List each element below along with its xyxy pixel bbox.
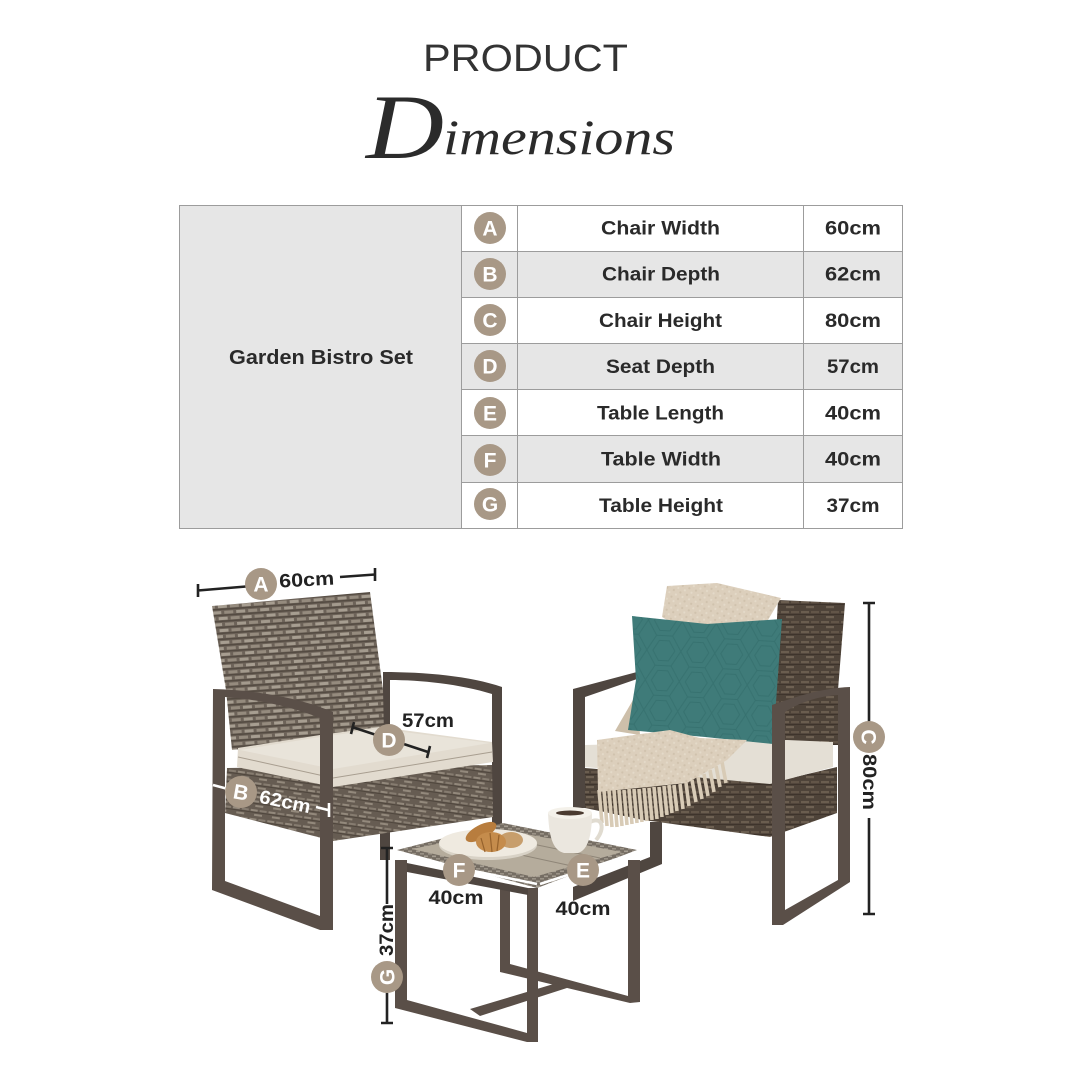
callout B: chair depth: 62cm bbox=[257, 787, 313, 818]
callout G: table height bbox=[371, 848, 403, 1023]
table top bbox=[397, 823, 637, 888]
row A: chair width: Chair Width bbox=[601, 218, 720, 240]
row C: chair height: 80cm bbox=[825, 311, 881, 332]
row G: table height: G bbox=[482, 494, 498, 516]
wicker seat base bbox=[225, 765, 493, 841]
product name cell bbox=[180, 205, 461, 528]
row G: table height: Table Height bbox=[599, 496, 724, 517]
teal pillow bbox=[628, 616, 782, 744]
row F: table width bbox=[474, 444, 881, 476]
heading: script Dimensions: imensions bbox=[443, 109, 675, 165]
chair back frame bbox=[383, 672, 502, 830]
row D: seat depth bbox=[474, 350, 879, 382]
callout D: seat depth bbox=[351, 711, 454, 758]
callout A: chair width bbox=[198, 568, 375, 600]
row C: chair height: C bbox=[482, 310, 498, 332]
heading: PRODUCT: PRODUCT bbox=[423, 38, 628, 80]
row F: table width: F bbox=[484, 450, 497, 472]
plate with croissants bbox=[439, 818, 537, 860]
callout A: chair width: 60cm bbox=[279, 569, 335, 592]
callout G: table height: G bbox=[376, 969, 400, 985]
knitted throw with fringe bbox=[597, 730, 747, 827]
callout C: chair height: 80cm bbox=[858, 754, 879, 810]
row B: chair depth: B bbox=[482, 264, 498, 286]
row B: chair depth: 62cm bbox=[825, 264, 881, 286]
callout E: table length: E bbox=[576, 860, 590, 882]
seat cushion bbox=[237, 727, 493, 787]
row D: seat depth: 57cm bbox=[827, 357, 879, 378]
row D: seat depth: Seat Depth bbox=[606, 357, 715, 378]
callout F: table width bbox=[396, 854, 537, 909]
row E: table length bbox=[474, 397, 881, 429]
row F: table width: Table Width bbox=[601, 450, 721, 470]
heading: script Dimensions: D bbox=[364, 76, 444, 178]
product name cell: Garden Bistro Set bbox=[229, 347, 413, 369]
row E: table length: 40cm bbox=[825, 404, 881, 424]
row A: chair width: A bbox=[482, 218, 498, 240]
row A: chair width bbox=[474, 212, 881, 244]
wicker seat base bbox=[585, 767, 837, 837]
rear leg frame bbox=[573, 822, 662, 901]
row E: table length: E bbox=[483, 402, 497, 426]
left arm frame bbox=[573, 672, 637, 808]
coffee cup bbox=[548, 807, 602, 853]
side table bbox=[395, 807, 640, 1042]
callout G: table height: 37cm bbox=[377, 904, 398, 956]
row G: table height bbox=[474, 488, 880, 520]
row C: chair height bbox=[474, 304, 881, 336]
callout F: table width: 40cm bbox=[428, 888, 484, 909]
callout E: table length bbox=[540, 853, 636, 920]
table legs and rails bbox=[395, 860, 640, 1042]
right wicker chair bbox=[573, 583, 850, 925]
dimensions table bbox=[180, 205, 902, 528]
row B: chair depth bbox=[474, 258, 881, 290]
callout B: chair depth: B bbox=[231, 780, 250, 806]
wicker backrest bbox=[770, 600, 845, 745]
seat cushion bbox=[585, 740, 833, 784]
callout E: table length: 40cm bbox=[556, 899, 610, 920]
row B: chair depth: Chair Depth bbox=[602, 264, 720, 286]
callout D: seat depth: 57cm bbox=[402, 711, 454, 732]
row C: chair height: Chair Height bbox=[599, 311, 723, 332]
callout D: seat depth: D bbox=[381, 730, 397, 752]
front frame bbox=[772, 687, 850, 925]
row G: table height: 37cm bbox=[826, 496, 880, 517]
row A: chair width: 60cm bbox=[825, 218, 881, 240]
wicker backrest bbox=[212, 592, 384, 750]
row E: table length: Table Length bbox=[597, 404, 724, 424]
draped throw at top bbox=[662, 583, 781, 640]
callout C: chair height bbox=[853, 603, 885, 914]
callout C: chair height: C bbox=[856, 729, 880, 745]
row F: table width: 40cm bbox=[825, 450, 881, 470]
left wicker chair bbox=[212, 592, 502, 930]
title: PRODUCT Dimensions bbox=[364, 38, 675, 178]
front frame bbox=[212, 689, 333, 930]
callout A: chair width: A bbox=[253, 574, 269, 596]
callout B: chair depth bbox=[213, 776, 329, 818]
row D: seat depth: D bbox=[482, 356, 498, 378]
callout F: table width: F bbox=[453, 860, 466, 882]
